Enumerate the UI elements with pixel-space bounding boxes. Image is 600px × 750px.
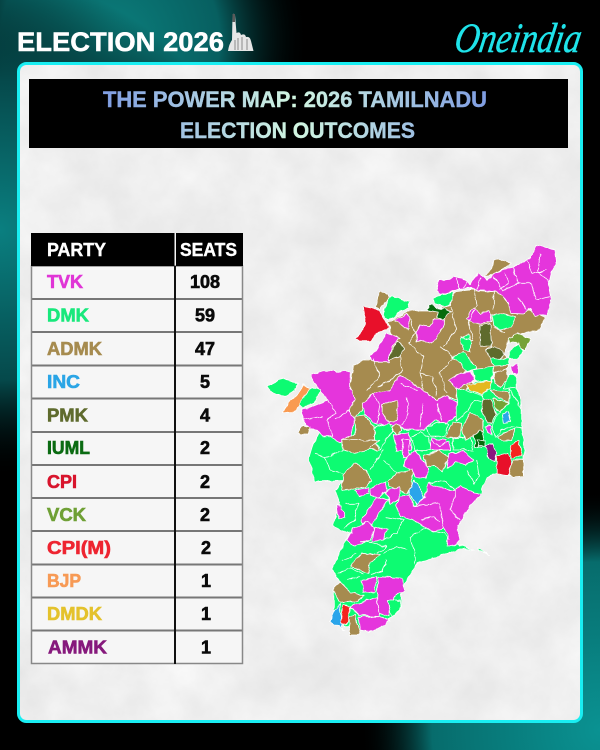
seat counts: 1 [201, 638, 211, 658]
party names: PMK [47, 406, 88, 426]
party names: BJP [47, 571, 81, 591]
party names: DMDK [47, 604, 102, 624]
party names: AMMK [48, 638, 107, 658]
map: constituency boundaries [303, 253, 550, 580]
seat counts: 59 [195, 306, 215, 326]
map: southern base and districts [308, 373, 524, 632]
title banner [29, 79, 568, 148]
seat counts [190, 272, 220, 658]
title banner: ELECTION OUTCOMES [180, 118, 415, 143]
seat counts: 5 [200, 372, 210, 392]
table header: SEATS [180, 240, 237, 260]
party names: TVK [47, 272, 83, 292]
party names: INC [47, 372, 80, 392]
party names: ADMK [47, 339, 102, 359]
seat counts: 2 [200, 472, 210, 492]
seat counts: 1 [201, 604, 211, 624]
seat counts: 1 [201, 571, 211, 591]
seat counts: 47 [195, 339, 215, 359]
party names: VCK [47, 505, 86, 525]
party names: CPI [47, 472, 77, 492]
map: northern districts [267, 245, 557, 450]
seat counts: 2 [201, 538, 211, 558]
party names: CPI(M) [47, 538, 111, 558]
party names [47, 272, 111, 658]
icon: inked voting finger [228, 14, 254, 51]
table header [31, 233, 243, 266]
map: southern districts [330, 440, 524, 635]
party names: IUML [47, 438, 90, 458]
seat counts: 108 [190, 272, 220, 292]
table header: PARTY [47, 240, 106, 260]
table: party seats [31, 233, 243, 664]
heading: Election 2026: ELECTION 2026 [17, 27, 224, 57]
map: Tamil Nadu constituencies by winning party [267, 245, 557, 635]
party names: DMK [47, 306, 89, 326]
title banner: THE POWER MAP: 2026 TAMILNADU [103, 87, 487, 112]
seat counts: 4 [200, 406, 210, 426]
seat counts: 2 [200, 505, 210, 525]
seat counts: 2 [200, 438, 210, 458]
